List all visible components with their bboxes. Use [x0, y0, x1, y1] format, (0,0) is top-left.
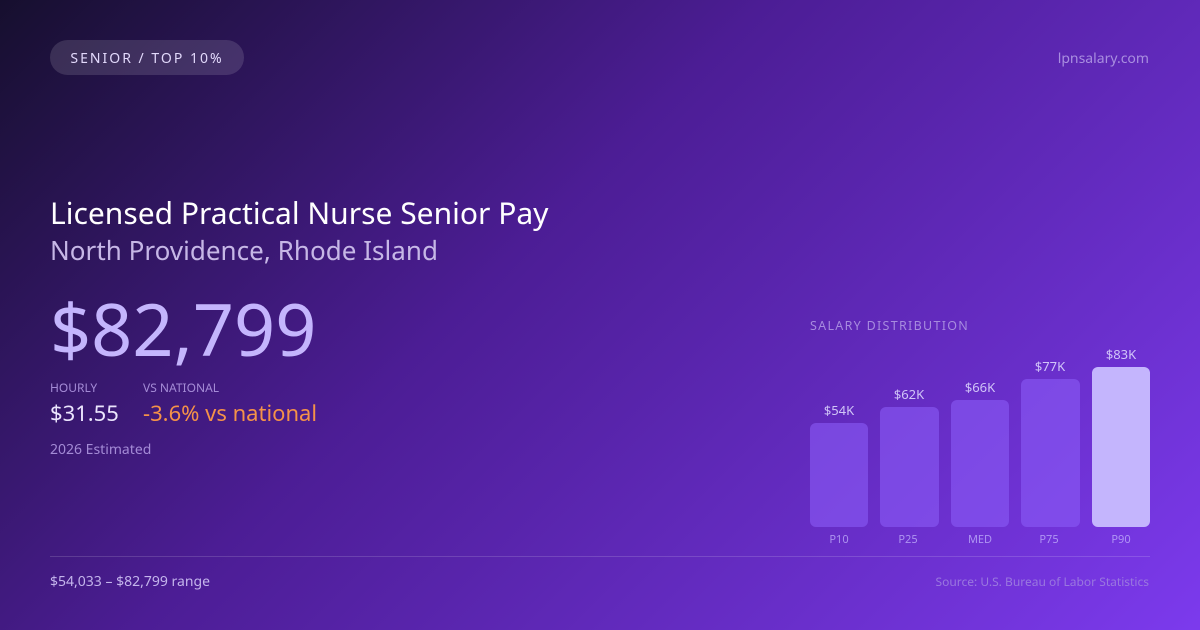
value: P10: $54K [824, 401, 854, 419]
vs national value: -3.6% vs national [143, 398, 317, 428]
axis label: P25: P25 [898, 532, 918, 547]
bar: P25 [880, 407, 939, 527]
salary range: $54,033 – $82,799 range [50, 572, 210, 591]
value: MED: $66K [965, 378, 995, 396]
site name: lpnsalary.com [1058, 49, 1149, 68]
bar: P10 [810, 423, 868, 527]
value: P25: $62K [894, 385, 924, 403]
axis label: MED: MED [968, 532, 992, 547]
value: P90: $83K [1106, 345, 1136, 363]
subtitle: location: North Providence, Rhode Island [50, 232, 438, 268]
hourly label: HOURLY [50, 379, 97, 396]
bar: P90 [1092, 367, 1150, 527]
axis label: P75: P75 [1039, 532, 1059, 547]
year note: 2026 Estimated [50, 440, 151, 459]
main salary figure: $82,799 [50, 280, 316, 378]
bar: MED [951, 400, 1009, 527]
hourly value: $31.55 [50, 398, 119, 428]
badge: senior / top 10% [50, 40, 244, 75]
axis label: P10: P10 [829, 532, 849, 547]
stat: hourly [50, 379, 119, 428]
value: P75: $77K [1035, 357, 1065, 375]
chart heading: SALARY DISTRIBUTION [810, 317, 969, 334]
source note: Source: U.S. Bureau of Labor Statistics [936, 573, 1149, 590]
stat: vs national [143, 379, 317, 428]
bar: P75 [1021, 379, 1080, 527]
axis label: P90: P90 [1111, 532, 1131, 547]
title: Licensed Practical Nurse Senior Pay [50, 192, 548, 233]
badge: senior / top 10%: SENIOR / TOP 10% [70, 49, 224, 68]
vs national label: VS NATIONAL [143, 379, 219, 396]
